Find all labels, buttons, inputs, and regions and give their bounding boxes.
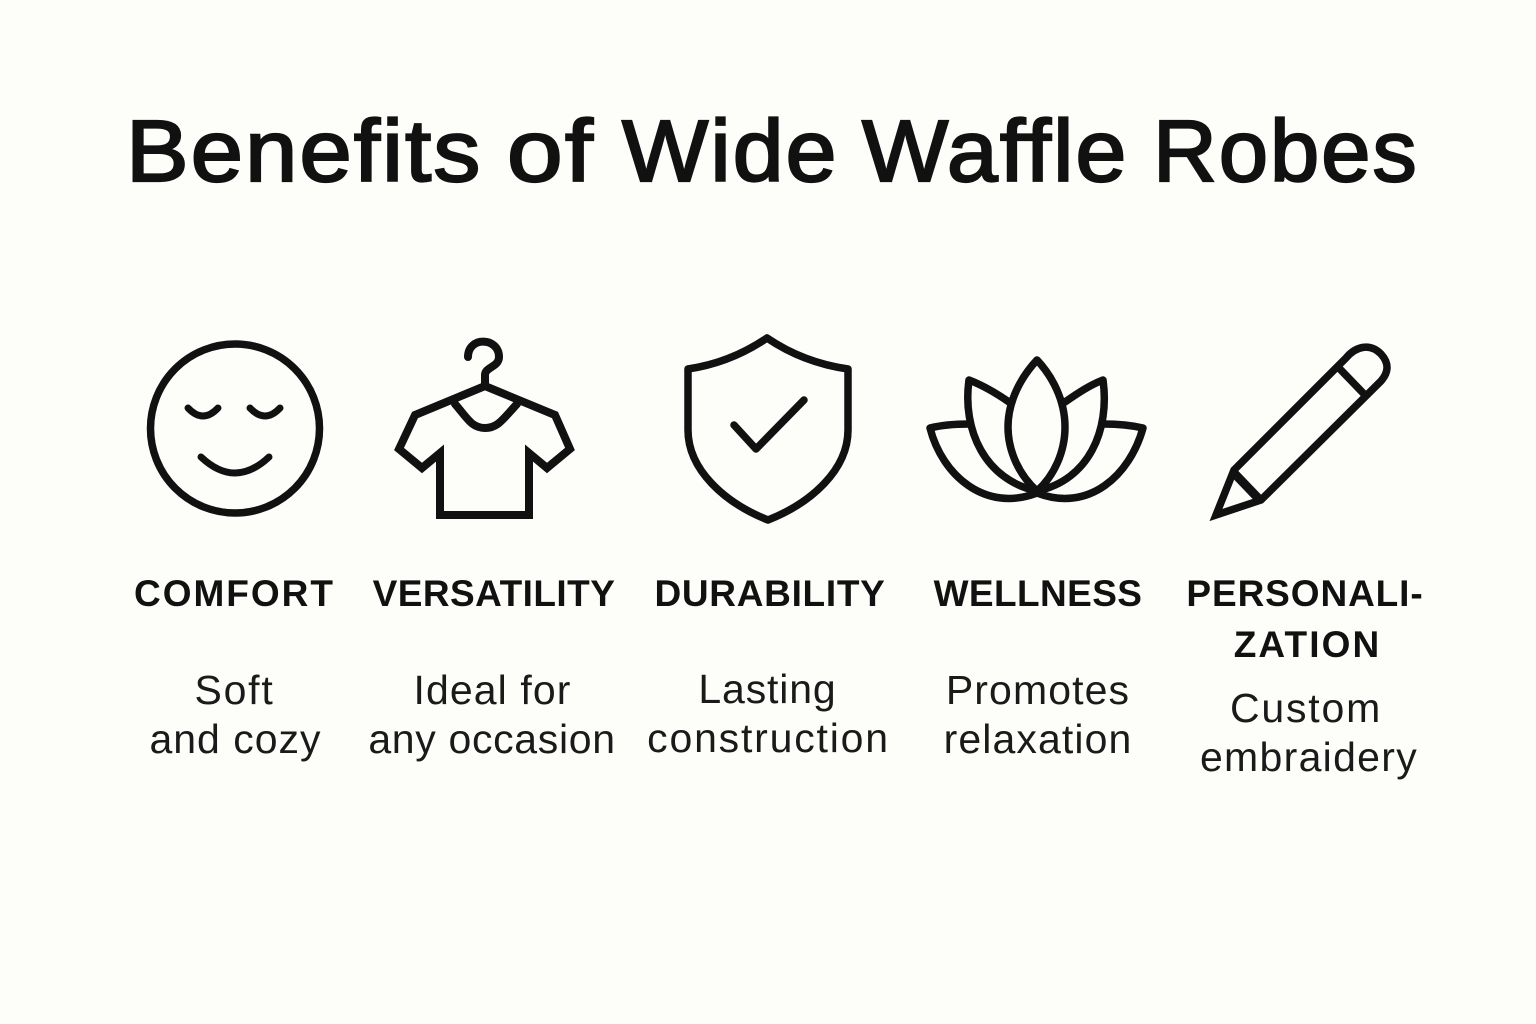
icon: pencil	[1216, 347, 1387, 515]
column: wellness	[934, 573, 1142, 762]
text: durability description: construction	[647, 715, 890, 761]
heading: personalization: ZATION	[1234, 624, 1381, 665]
heading: wellness: WELLNESS	[934, 573, 1142, 614]
text: wellness description	[944, 667, 1132, 762]
column: comfort	[134, 573, 335, 762]
heading: personalization	[1186, 573, 1424, 665]
text: versatility description: Ideal for	[413, 667, 572, 713]
icon: lotus	[930, 360, 1143, 498]
title: of	[507, 103, 595, 200]
title: Waffle	[862, 103, 1128, 200]
heading: versatility: VERSATILITY	[373, 573, 615, 614]
text: wellness description: Promotes	[946, 667, 1130, 713]
column: versatility	[368, 573, 616, 762]
column: personalization	[1186, 573, 1424, 780]
text: durability description: Lasting	[698, 666, 837, 712]
heading: personalization: PERSONALI-	[1186, 573, 1424, 614]
title	[126, 103, 1419, 200]
title: Robes	[1153, 103, 1419, 200]
heading: durability: DURABILITY	[654, 573, 886, 614]
text: comfort description: Soft	[195, 667, 274, 713]
text: versatility description	[368, 667, 616, 762]
text: comfort description	[149, 667, 322, 762]
column: durability	[647, 573, 890, 761]
text: comfort description: and cozy	[149, 716, 322, 762]
icon: shield with check	[688, 338, 848, 520]
icon: smiling face	[150, 344, 320, 513]
text: versatility description: any occasion	[368, 716, 616, 762]
icon: shirt on hanger	[399, 342, 570, 515]
text: wellness description: relaxation	[944, 716, 1132, 762]
heading: comfort: COMFORT	[134, 573, 335, 614]
title: Benefits	[126, 103, 482, 200]
text: durability description	[647, 666, 890, 761]
text: personalization description: Custom	[1230, 685, 1382, 731]
title: Wide	[622, 103, 839, 200]
text: personalization description	[1200, 685, 1418, 780]
text: personalization description: embraidery	[1200, 734, 1418, 780]
